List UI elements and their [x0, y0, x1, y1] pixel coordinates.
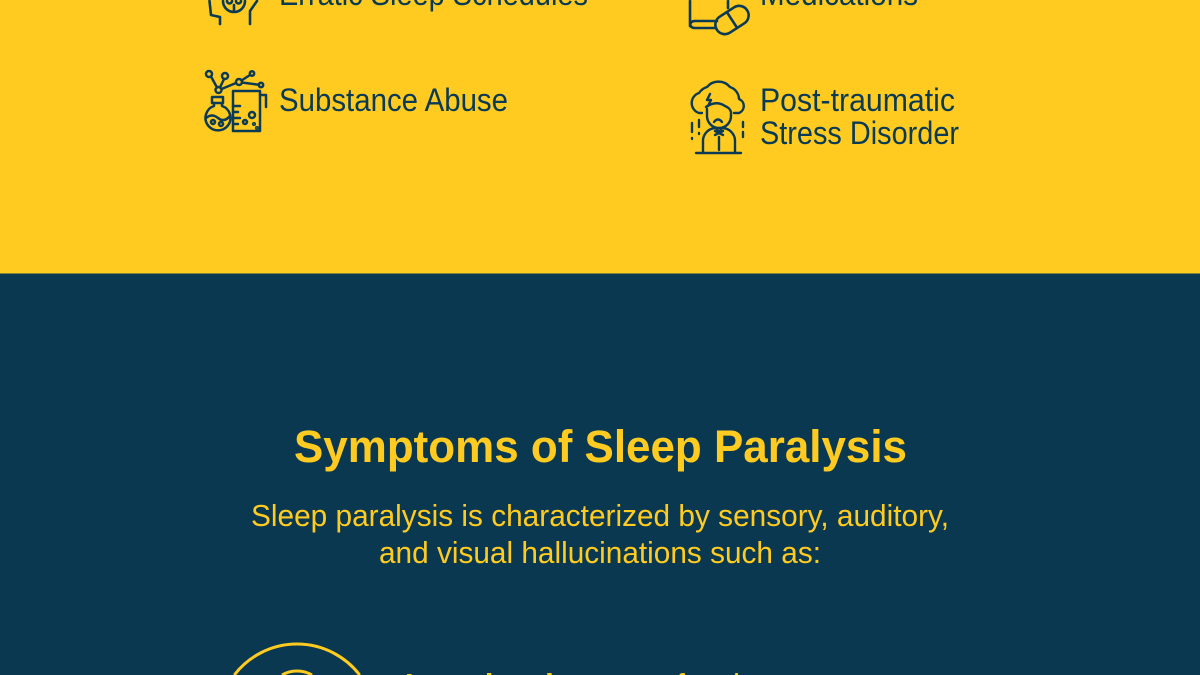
- heading: symptoms of sleep paralysis: Symptoms of Sleep Paralysis: [294, 421, 907, 472]
- label: post-traumatic stress disorder: Post-traumatic: [760, 82, 955, 118]
- symptom text, cropped at the page edge: [405, 668, 740, 675]
- icon: symptom circle: [234, 644, 360, 675]
- label: substance abuse: Substance Abuse: [279, 82, 508, 118]
- panel: risk factors: [0, 0, 1200, 274]
- icon: head with brain: [210, 1, 257, 24]
- intro text: Sleep paralysis is characterized by sensory, auditory,: [251, 498, 949, 533]
- icon: stressed person under cloud: [692, 82, 744, 153]
- icon: book and pill: [690, 1, 752, 38]
- label: post-traumatic stress disorder: [760, 82, 959, 151]
- intro text: [251, 498, 949, 570]
- panel: symptoms: [0, 274, 1200, 675]
- icon: flask and beaker: [205, 71, 266, 131]
- label: post-traumatic stress disorder: Stress Disorder: [760, 115, 959, 151]
- intro text: and visual hallucinations such as:: [379, 535, 821, 570]
